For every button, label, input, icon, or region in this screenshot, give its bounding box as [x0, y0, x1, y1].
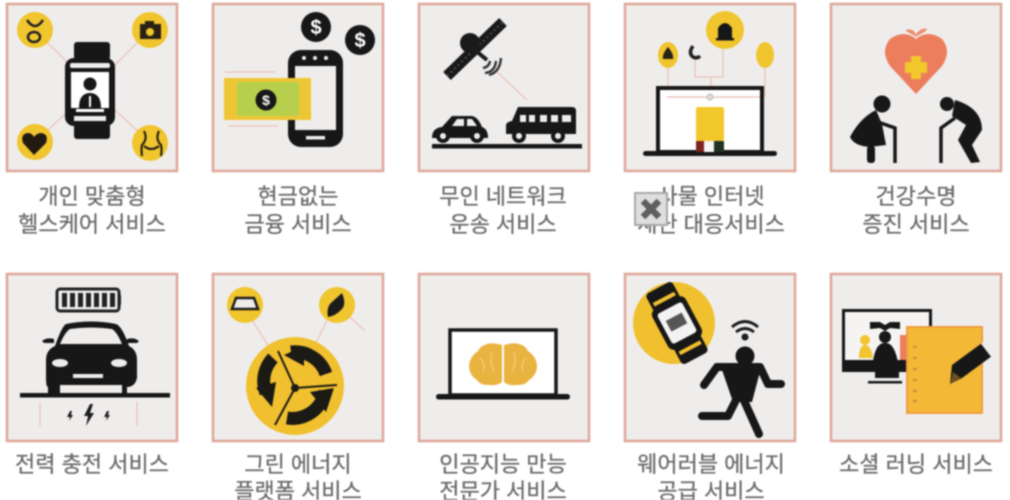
- icon: smartwatch: [65, 42, 115, 139]
- icon: wifi: [732, 322, 758, 339]
- panel: personalized healthcare: [7, 4, 177, 171]
- icon: coin one: $: [310, 17, 322, 39]
- panel: social learning: [831, 274, 1001, 441]
- icon: solar panel: [227, 287, 263, 323]
- icon: laptop: [436, 330, 570, 400]
- caption: unmanned network transport: 운송 서비스: [449, 212, 557, 237]
- icon: elderly man: [940, 97, 982, 163]
- icon: necklace: [17, 12, 53, 48]
- caption: healthy life expectancy: 증진 서비스: [862, 212, 970, 237]
- caption: cashless finance: 금융 서비스: [244, 212, 352, 237]
- panel: cashless finance: [213, 4, 383, 171]
- panel: green energy platform: [213, 274, 383, 441]
- icon: lightning bolts: [67, 404, 110, 426]
- road: [432, 144, 582, 148]
- panel: wearable energy supply: [625, 274, 795, 441]
- panel: wireless power charging: [7, 274, 177, 441]
- icon: heart with cross: [885, 29, 947, 94]
- road: [20, 393, 170, 398]
- icon: smartphone: [288, 50, 343, 147]
- icon: coin two: $: [354, 30, 366, 52]
- caption: wearable energy supply: 웨어러블 에너지: [637, 452, 785, 477]
- icon: machine: [696, 107, 724, 152]
- icon: banknote: [224, 78, 311, 120]
- panel: IoT disaster response: [625, 4, 795, 171]
- caption: personalized healthcare: 개인 맞춤형: [38, 184, 146, 209]
- icon: car front: [42, 322, 139, 395]
- icon: recycle with turbine: [246, 337, 344, 435]
- icon: brain: [469, 343, 537, 385]
- caption: healthy life expectancy: 건강수명: [876, 184, 956, 209]
- icon: bus: [506, 107, 576, 143]
- icon: car: [432, 116, 488, 143]
- caption: IoT disaster response: 재난 대응서비스: [637, 212, 785, 237]
- icon: notebook: [907, 327, 982, 413]
- icon: banknote: $: [262, 92, 270, 108]
- caption: social learning: 소셜 러닝 서비스: [839, 452, 993, 477]
- icon: yellow circle with watch: [633, 279, 715, 367]
- icon: bulb: [756, 42, 774, 68]
- icon: battery: [57, 289, 121, 311]
- icon: pencil: [950, 343, 992, 384]
- icon: broken image placeholder: [635, 193, 667, 225]
- panel: AI expert: [419, 274, 589, 441]
- icon: heart: [17, 124, 53, 160]
- icon: coin one: [301, 12, 331, 42]
- icon: monitor: [842, 309, 932, 384]
- panel: healthy life expectancy: [831, 4, 1001, 171]
- icon: coin two: [345, 25, 375, 55]
- icon: wrench: [690, 46, 700, 58]
- caption: unmanned network transport: 무인 네트워크: [439, 184, 567, 209]
- icon: fire: [658, 42, 678, 68]
- caption: AI expert: 인공지능 만능: [439, 452, 567, 477]
- icon: elderly woman: [850, 96, 895, 163]
- caption: green energy platform: 그린 에너지: [244, 452, 352, 477]
- icon: runner: [702, 346, 781, 434]
- icon: leaf: [319, 287, 355, 323]
- icon: alarm: [706, 11, 744, 49]
- icon: people on screen: [859, 322, 910, 370]
- caption: IoT disaster response: 사물 인터넷: [657, 184, 765, 209]
- caption: personalized healthcare: 헬스케어 서비스: [18, 212, 166, 237]
- icon: waist: [132, 125, 168, 161]
- icon: camera: [132, 12, 168, 48]
- icon: satellite: [447, 22, 503, 76]
- icon: laptop: [643, 88, 777, 156]
- caption: cashless finance: 현금없는: [258, 184, 338, 209]
- caption: wireless power charging: 전력 충전 서비스: [15, 452, 169, 477]
- panel: unmanned network transport: [419, 4, 589, 171]
